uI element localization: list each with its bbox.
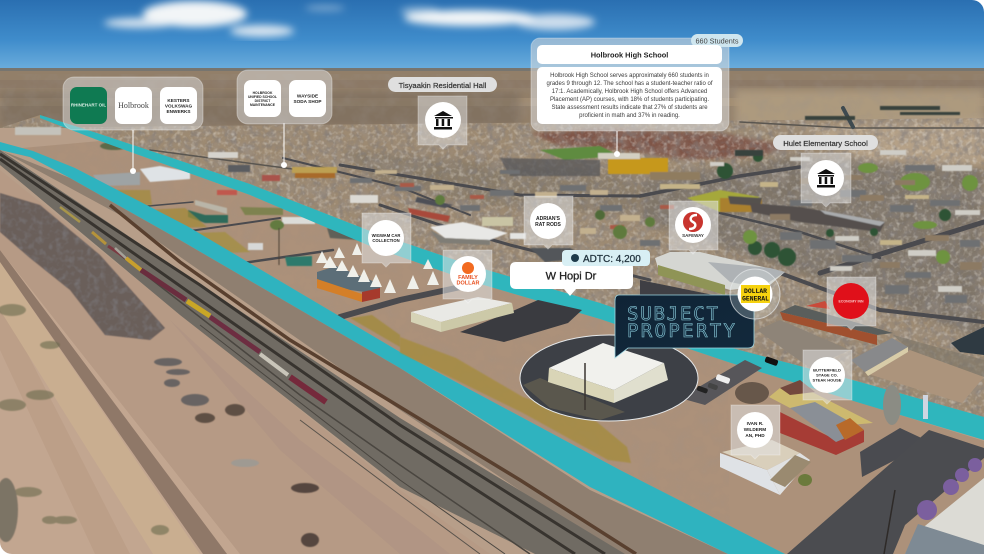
marker: Butterfield Stage Co. Steak House: BUTTERFIELD — [813, 368, 841, 372]
red restaurant building — [735, 380, 930, 477]
left town buildings — [140, 166, 190, 182]
callout: brand group left — [63, 77, 203, 174]
description: 17:1. Academically, Holbrook High School offers Advanced — [552, 89, 707, 95]
logo: Holbrook Unified School District Maintenance — [244, 80, 281, 117]
family dollar building — [411, 297, 582, 342]
marker: Tisyaakin — [418, 96, 467, 149]
marker: Butterfield Stage Co. Steak House: STEAK HOUSE — [813, 378, 842, 382]
marker: Family Dollar — [443, 250, 492, 303]
logo: Kesters Volkswagenwerks — [160, 87, 197, 124]
description: proficient in math and 37% in reading. — [579, 113, 680, 119]
strip between railway and canal — [0, 150, 728, 554]
logo: Holbrook Unified School District Maintenance: DISTRICT — [255, 99, 271, 103]
marker: Adrian's Rat Rods: RAT RODS — [535, 222, 562, 228]
marker: Family Dollar: DOLLAR — [457, 280, 479, 286]
hulet elementary — [687, 190, 760, 212]
marker: Safeway: SAFEWAY — [682, 233, 704, 238]
town detail blocks — [15, 106, 982, 347]
marker: Butterfield Stage Co. Steak House: STAGE CO. — [816, 372, 838, 378]
marker: Ivan R. Wilderman, PhD: AN, PHD — [745, 433, 765, 438]
logo: Wayside Soda Shop: WAYSIDE — [297, 94, 318, 98]
callout: Subject Property: SUBJECT — [627, 303, 718, 325]
label: Hulet Elementary School: Hulet Elementary School — [783, 139, 868, 148]
heading — [537, 45, 722, 64]
town roads — [137, 108, 984, 322]
debris piles — [154, 358, 319, 547]
logo: Rhinehart Oil: RHINEHART OIL — [71, 102, 106, 108]
label: Tisyaakin Residential Hall — [388, 77, 497, 92]
logo: Kesters Volkswagenwerks: ENWERKS — [167, 109, 190, 114]
marker: Ivan R. Wilderman, PhD: IVAN R. — [747, 421, 763, 426]
right neighbourhood roofs — [780, 165, 980, 303]
marker: Adrian's Rat Rods — [524, 196, 573, 249]
roadside scrub — [400, 337, 631, 463]
badge: student count: 660 Students — [695, 36, 739, 46]
logo: Holbrook Unified School District Maintenance: HOLBROOK — [253, 91, 273, 95]
description: Placement (AP) courses, with 18% of students participating. — [550, 97, 709, 103]
callout: Subject Property — [615, 295, 754, 358]
label: Tisyaakin Residential Hall: Tisyaakin Residential Hall — [399, 81, 487, 90]
callout: Holbrook High School — [531, 34, 743, 157]
freight train — [60, 207, 326, 402]
marker: Family Dollar: FAMILY — [458, 275, 478, 281]
marker: Dollar General: DOLLAR — [744, 288, 767, 295]
teal canal upper — [40, 115, 984, 440]
marker: Economy Inn — [827, 277, 876, 330]
description: State assessment results indicate that 27% of students are — [551, 105, 708, 111]
traffic count badge — [562, 250, 650, 266]
economy inn building — [780, 301, 984, 376]
marker: Wigwam Car Collection: COLLECTION — [372, 238, 400, 243]
red ridge — [530, 129, 790, 160]
town base — [0, 115, 984, 417]
right ground lots — [865, 350, 984, 403]
desert brush — [0, 193, 165, 340]
high school campus — [540, 146, 620, 160]
sky — [0, 0, 984, 72]
mid strip base — [0, 141, 984, 554]
callout: brand group right — [237, 70, 332, 168]
teal canal lower — [0, 142, 785, 554]
logo: Kesters Volkswagenwerks: VOLKSWAG — [165, 104, 193, 108]
logo: Holbrook Unified School District Maintenance: UNIFIED SCHOOL — [248, 95, 277, 99]
road label: W Hopi Dr — [510, 262, 633, 296]
marker: Wigwam Car Collection — [362, 213, 411, 267]
dry yellow lots — [112, 190, 152, 205]
logo: Holbrook: Holbrook — [118, 101, 149, 110]
wigwam motel — [316, 243, 439, 302]
mid town buildings — [408, 208, 450, 222]
icon: car — [571, 254, 579, 262]
marker: Adrian's Rat Rods: ADRIAN'S — [536, 216, 561, 222]
road label: W Hopi Dr: W Hopi Dr — [546, 270, 597, 282]
marker: Hulet — [801, 153, 851, 207]
marker: Wigwam Car Collection: WIGWAM CAR — [372, 233, 400, 238]
logo: Wayside Soda Shop: SODA SHOP — [294, 99, 321, 104]
marker: Dollar General: GENERAL — [742, 296, 769, 302]
trees — [717, 152, 951, 266]
ground base — [0, 128, 984, 554]
traffic count badge: ADTC: 4,200 — [583, 254, 641, 265]
description: grades 9 through 12. The school has a student-teacher ratio of — [546, 81, 713, 87]
parking lot and cars — [680, 356, 779, 405]
badge: student count — [691, 34, 743, 47]
texture: town clutter — [0, 118, 984, 418]
callout: Subject Property: PROPERTY — [627, 320, 736, 342]
marker: Economy Inn: ECONOMY INN — [838, 300, 864, 304]
logo: Kesters Volkswagenwerks: KESTERS — [167, 98, 190, 103]
marker: Ivan R. Wilderman, PhD: WILDERM — [744, 427, 766, 432]
far land bands — [0, 68, 984, 72]
logo: Holbrook Unified School District Maintenance: MAINTENANCE — [250, 103, 276, 107]
logo: Wayside Soda Shop — [289, 80, 326, 117]
clouds — [104, 1, 595, 37]
marker: Safeway — [669, 201, 718, 254]
mid dirt strip — [0, 170, 490, 554]
label: Hulet Elementary School — [773, 135, 878, 150]
safeway building — [640, 252, 785, 318]
marker: Dollar General — [730, 269, 780, 319]
road right bottom — [787, 430, 984, 554]
heading: Holbrook High School — [591, 50, 668, 60]
description: Holbrook High School serves approximately 660 students in — [550, 73, 709, 79]
ivan building — [720, 440, 812, 495]
description — [537, 67, 722, 124]
railway tracks — [0, 150, 636, 554]
darker built-up town — [640, 155, 984, 340]
subject property site — [520, 335, 698, 421]
marker: Ivan R. Wilderman, PhD — [731, 405, 780, 459]
left desert strips — [0, 250, 240, 554]
marker: Butterfield Stage Co. Steak House — [803, 350, 852, 404]
